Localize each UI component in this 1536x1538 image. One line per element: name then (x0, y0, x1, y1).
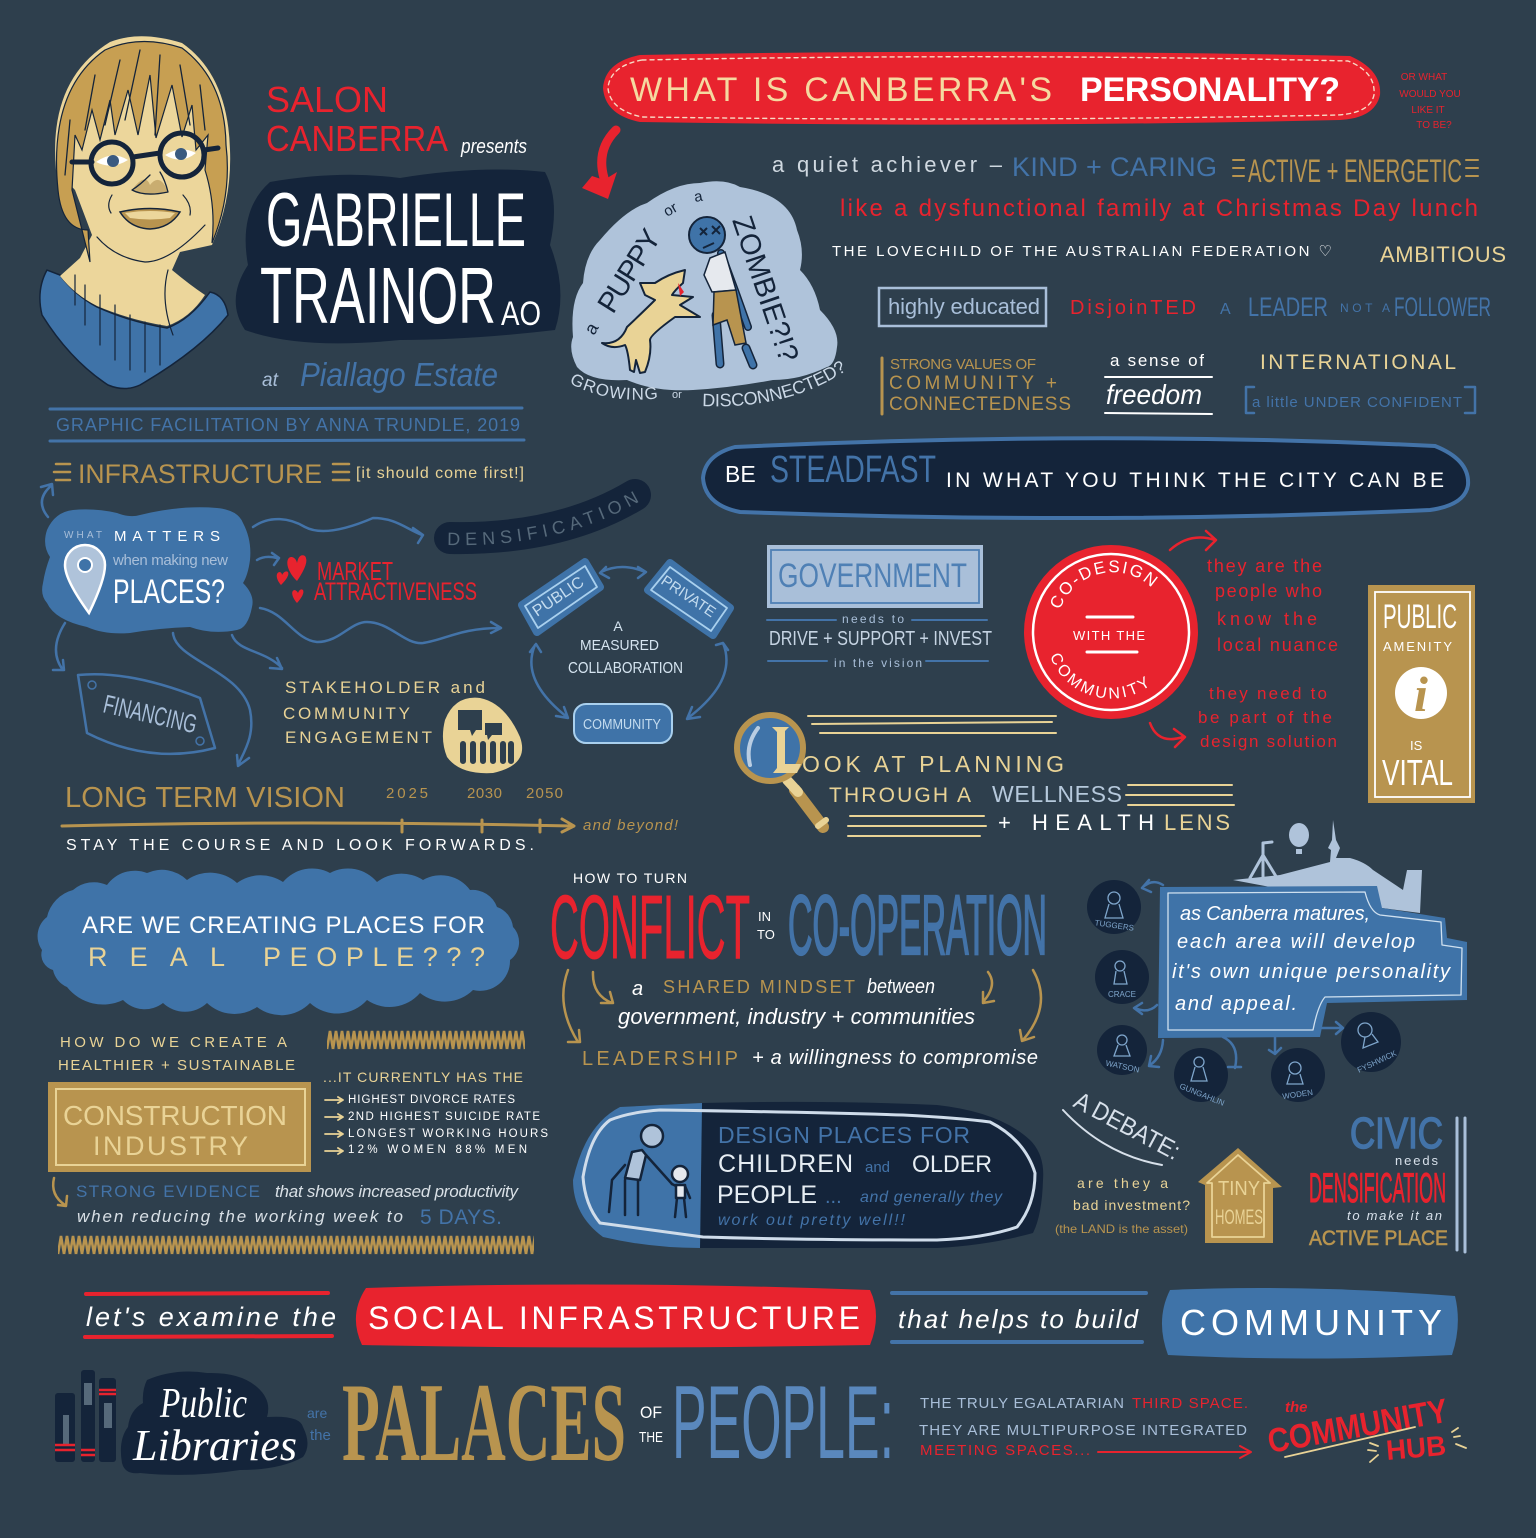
text: shared mindset: + a willingness to compromise (752, 1047, 1038, 1069)
personality text: highly educated, disjointed, leader not a follower: A (1220, 301, 1231, 318)
personality text: highly educated, disjointed, leader not a follower (879, 288, 1491, 326)
cloud: public libraries (121, 1372, 307, 1475)
banner: let's examine the social infrastructure: COMMUNITY (1180, 1302, 1442, 1343)
text: shared mindset: a (632, 978, 643, 1000)
name panel: Gabrielle Trainor AO: TRAINOR (260, 251, 496, 340)
panel: a puppy or a zombie (571, 181, 844, 406)
panel: a puppy or a zombie: a (580, 318, 603, 338)
text: civic needs densification: needs (1395, 1153, 1438, 1168)
panel: design places for children and older people: ... (825, 1186, 842, 1208)
banner: let's examine the social infrastructure: SOCIAL INFRASTRUCTURE (368, 1300, 860, 1336)
title: are the palaces of the people: PALACES (342, 1361, 626, 1485)
personality text: highly educated, disjointed, leader not a follower: NOT A (1340, 301, 1390, 315)
banner: be steadfast (703, 438, 1468, 518)
suburb badges: WODEN (1282, 1088, 1314, 1101)
badge: co-design with the community (1024, 545, 1198, 719)
magnifying glass: look at planning through a wellness lens: THROUGH A (829, 784, 971, 807)
banner: let's examine the social infrastructure: let's examine the (86, 1302, 336, 1332)
credit: graphic facilitation: GRAPHIC FACILITATION BY ANNA TRUNDLE, 2019 (56, 415, 520, 435)
panel: public amenity is vital: PUBLIC (1383, 598, 1457, 636)
text: PEOPLE: (672, 1365, 894, 1481)
text: civic needs densification: ACTIVE PLACE (1309, 1227, 1448, 1250)
stakeholder and community engagement: COMMUNITY (283, 704, 410, 723)
suburb badges (1087, 880, 1401, 1108)
cloud: are we creating places for real people: REAL (88, 942, 225, 972)
magnifying glass: look at planning through a wellness lens (737, 715, 1234, 836)
financing flag: FINANCING (101, 689, 200, 739)
name panel: Gabrielle Trainor AO: GABRIELLE (266, 178, 526, 263)
heading: how to turn conflict into co-operation: HOW TO TURN (573, 870, 687, 886)
venue: at Piallago Estate: Piallago Estate (300, 356, 498, 393)
government needs to: needs to (842, 612, 904, 626)
government needs to: DRIVE + SUPPORT + INVEST (769, 628, 992, 650)
collaboration cycle: public, private, community: PRIVATE (658, 572, 719, 621)
debate: tiny homes: (the LAND is the asset) (1055, 1222, 1188, 1236)
red notes: they are the people who know the local nuance (1150, 531, 1338, 751)
text: strong evidence 5 days (53, 1178, 519, 1229)
collaboration cycle: public, private, community: COMMUNITY (583, 716, 661, 733)
panel: as Canberra matures, with skyline (1158, 820, 1467, 1038)
heading: how to turn conflict into co-operation: CONFLICT (550, 878, 750, 978)
suburb badges: FYSHWICK (1356, 1048, 1399, 1075)
title: are the palaces of the people: OF (640, 1403, 662, 1422)
banner: What is Canberra's personality (603, 52, 1380, 125)
text: shared mindset: government, industry + communities (618, 1004, 975, 1029)
list: it currently has the: LONGEST WORKING HOURS (348, 1128, 548, 1140)
panel: a puppy or a zombie: PUPPY (592, 224, 668, 319)
portrait of Gabrielle Trainor (40, 36, 230, 389)
red notes: they are the people who know the local nuance: know the (1217, 609, 1317, 629)
title: are the palaces of the people: THE (639, 1429, 663, 1446)
personality text: love child of federation, ambitious (832, 242, 1506, 267)
books icon (55, 1370, 116, 1462)
heading: infrastructure: INFRASTRUCTURE (78, 459, 322, 489)
personality text: highly educated, disjointed, leader not a follower: LEADER (1248, 292, 1328, 322)
red notes: they are the people who know the local nuance: be part of the (1198, 708, 1332, 727)
badge: co-design with the community: COMMUNITY (1052, 654, 1147, 699)
long term vision timeline: STAY THE COURSE AND LOOK FORWARDS. (66, 837, 534, 854)
panel: a puppy or a zombie: or (660, 199, 681, 220)
list: it currently has the (323, 1069, 548, 1156)
zigzag scribbles (58, 1029, 534, 1256)
personality text: international, a little under confident: INTERNATIONAL (1260, 351, 1456, 374)
suburb badges: GUNGAHLIN (1178, 1082, 1226, 1108)
list: it currently has the: ...IT CURRENTLY HAS THE (323, 1069, 523, 1085)
venue: at Piallago Estate: at (262, 370, 279, 391)
debate: tiny homes: bad investment? (1073, 1197, 1190, 1213)
panel: what matters when making new places: MATTERS (114, 528, 220, 545)
heading: Salon Canberra presents: CANBERRA (266, 118, 448, 159)
list: it currently has the: 12% WOMEN 88% MEN (348, 1144, 527, 1156)
long term vision timeline (62, 782, 679, 854)
panel: design places for children and older people: OLDER (912, 1151, 992, 1178)
stakeholder and community engagement: ENGAGEMENT (285, 728, 432, 747)
personality text: international, a little under confident (1246, 351, 1475, 413)
cloud: are we creating places for real people (38, 868, 519, 1015)
cloud: are we creating places for real people: PEOPLE??? (263, 942, 485, 972)
panel: what matters when making new places: PLACES? (113, 573, 225, 611)
personality text: a sense of freedom: a sense of (1110, 351, 1204, 370)
panel: as Canberra matures, with skyline: it's own unique personality (1172, 961, 1451, 983)
arrow: red down (582, 130, 617, 199)
heading: how do we create a healthier and sustainable construction industry: CONSTRUCTION (63, 1100, 287, 1131)
personality text: a sense of freedom (1105, 351, 1212, 414)
personality text: strong values of community: STRONG VALUES OF (890, 356, 1036, 373)
debate: tiny homes (1055, 1087, 1282, 1243)
collaboration cycle: public, private, community: COLLABORATION (568, 660, 683, 677)
panel: a puppy or a zombie: or (672, 389, 682, 401)
heading: how do we create a healthier and sustainable construction industry: HOW DO WE CREATE A (60, 1034, 287, 1051)
personality text: quiet achiever, kind and caring, active and energetic: KIND + CARING (1012, 152, 1217, 182)
government needs to: GOVERNMENT (778, 557, 967, 595)
heading: infrastructure: [it should come first!] (356, 465, 524, 482)
stakeholder and community engagement: STAKEHOLDER and (285, 678, 485, 697)
personality text: strong values of community: CONNECTEDNESS (889, 394, 1071, 415)
panel: design places for children and older people: work out pretty well!! (718, 1212, 906, 1229)
arrows: flows from places panel (41, 484, 501, 766)
panel: what matters when making new places: when making new (112, 552, 228, 569)
long term vision timeline: 2030 (467, 785, 502, 802)
suburb badges: WATSON (1105, 1059, 1140, 1075)
panel: public amenity is vital: AMENITY (1383, 639, 1452, 654)
badge: co-design with the community: WITH THE (1073, 628, 1145, 643)
collaboration cycle: public, private, community: PUBLIC (530, 574, 587, 620)
stakeholder and community engagement (283, 678, 522, 773)
note: or what would you like it to be: LIKE IT (1411, 105, 1445, 116)
text: strong evidence 5 days: that shows increased productivity (275, 1182, 520, 1201)
collaboration cycle: public, private, community (522, 562, 730, 743)
text: shared mindset: SHARED MINDSET (663, 977, 855, 997)
note: or what would you like it to be: OR WHAT (1401, 72, 1447, 83)
suburb badges: CRACE (1108, 990, 1136, 999)
heading: how do we create a healthier and sustainable construction industry: INDUSTRY (93, 1131, 248, 1161)
note: or what would you like it to be (1399, 72, 1461, 131)
text: shared mindset: LEADERSHIP (582, 1048, 738, 1070)
collaboration cycle: public, private, community: A (613, 618, 623, 634)
financing flag (78, 674, 215, 754)
heading: how to turn conflict into co-operation: IN (758, 909, 771, 924)
red notes: they are the people who know the local nuance: they are the (1207, 556, 1322, 576)
badge: co-design with the community: CO-DESIGN (1051, 560, 1158, 608)
cloud: are we creating places for real people: ARE WE CREATING PLACES FOR (82, 912, 485, 939)
long term vision timeline: and beyond! (583, 817, 679, 834)
text: strong evidence 5 days: STRONG EVIDENCE (76, 1182, 260, 1201)
heading: infrastructure (54, 459, 524, 489)
heading: Salon Canberra presents: presents (460, 136, 527, 158)
text: strong evidence 5 days: 5 DAYS. (420, 1206, 502, 1229)
banner: be steadfast: STEADFAST (770, 449, 936, 491)
text: third space: THE TRULY EGALATARIAN (920, 1395, 1124, 1412)
suburb badges: TUGGERS (1094, 918, 1135, 933)
long term vision timeline: LONG TERM VISION (65, 782, 345, 814)
personality text: highly educated, disjointed, leader not a follower: highly educated (888, 294, 1040, 319)
magnifying glass: look at planning through a wellness lens: + (998, 810, 1011, 835)
market attractiveness: MARKET (317, 556, 393, 586)
credit: graphic facilitation (50, 408, 524, 441)
text: CO-OPERATION (788, 878, 1047, 972)
panel: public amenity is vital: IS (1410, 738, 1423, 753)
label: the community hub: COMMUNITY (1265, 1392, 1451, 1461)
government needs to (767, 545, 992, 670)
personality text: highly educated, disjointed, leader not a follower: DisjoinTED (1070, 297, 1196, 319)
panel: what matters when making new places (42, 507, 253, 633)
debate: tiny homes: TINY (1218, 1178, 1260, 1200)
market attractiveness: ATTRACTIVENESS (314, 578, 477, 606)
title: are the palaces of the people: are (307, 1405, 327, 1421)
panel: design places for children and older people: and generally they (860, 1189, 1003, 1206)
panel: design places for children and older people: PEOPLE (717, 1181, 817, 1209)
magnifying glass: look at planning through a wellness lens: WELLNESS (992, 781, 1122, 807)
panel: design places for children and older people: DESIGN PLACES FOR (718, 1122, 970, 1148)
panel: design places for children and older people: and (865, 1159, 890, 1176)
banner: What is Canberra's personality: PERSONALITY? (1080, 71, 1340, 109)
panel: public amenity is vital: i (1414, 666, 1428, 722)
debate: tiny homes: are they a (1077, 1175, 1168, 1191)
personality text: a sense of freedom: freedom (1106, 379, 1202, 410)
title: are the palaces of the people: the (310, 1427, 331, 1444)
text: third space: THEY ARE MULTIPURPOSE INTEGRATED (919, 1422, 1247, 1439)
panel: a puppy or a zombie: a (693, 188, 705, 206)
panel: public amenity is vital: VITAL (1382, 752, 1453, 793)
market attractiveness (277, 555, 477, 606)
panel: design places for children and older people (573, 1102, 1043, 1248)
panel: as Canberra matures, with skyline: as Canberra matures, (1180, 903, 1370, 925)
red notes: they are the people who know the local nuance: local nuance (1217, 635, 1338, 655)
personality text: quiet achiever, kind and caring, active and energetic: a quiet achiever – (772, 152, 1003, 177)
text: strong evidence 5 days: when reducing the working week to (77, 1207, 403, 1226)
cloud: public libraries: Public (159, 1381, 247, 1427)
red notes: they are the people who know the local nuance: design solution (1200, 732, 1337, 751)
banner: let's examine the social infrastructure (85, 1284, 1458, 1358)
personality text: international, a little under confident: a little UNDER CONFIDENT (1252, 394, 1462, 411)
name panel: Gabrielle Trainor AO: AO (501, 295, 541, 333)
red notes: they are the people who know the local nuance: people who (1215, 581, 1322, 601)
personality text: strong values of community (882, 356, 1071, 415)
panel: a puppy or a zombie: ZOMBIE?!? (732, 216, 798, 359)
banner: be steadfast: IN WHAT YOU THINK THE CITY CAN BE (946, 469, 1444, 492)
panel: as Canberra matures, with skyline: each area will develop (1177, 931, 1415, 953)
heading: how do we create a healthier and sustainable construction industry (48, 1034, 311, 1172)
personality text: strong values of community: COMMUNITY + (889, 373, 1057, 394)
personality text: quiet achiever, kind and caring, active and energetic (772, 152, 1478, 189)
note: or what would you like it to be: TO BE? (1416, 120, 1452, 131)
text: third space (919, 1395, 1251, 1459)
long term vision timeline: 2050 (526, 785, 563, 802)
text: civic needs densification: CIVIC (1350, 1109, 1443, 1158)
list: it currently has the: HIGHEST DIVORCE RATES (348, 1094, 515, 1106)
long term vision timeline: 2025 (386, 785, 428, 802)
magnifying glass: look at planning through a wellness lens: LENS (1164, 810, 1230, 835)
banner: be steadfast: BE (725, 461, 756, 487)
panel: public amenity is vital (1368, 585, 1475, 803)
personality text: love child of federation, ambitious: AMBITIOUS (1380, 242, 1506, 267)
label: densification: DENSIFICATION (448, 491, 638, 546)
banner: What is Canberra's personality: WHAT IS CANBERRA'S (630, 71, 1052, 109)
government needs to: in the vision (834, 656, 922, 670)
heading: how to turn conflict into co-operation: TO (757, 927, 775, 942)
text: shared mindset: between (867, 976, 935, 998)
panel: as Canberra matures, with skyline: and appeal. (1175, 993, 1297, 1015)
panel: what matters when making new places: WHAT (64, 530, 102, 541)
personality text: dysfunctional family: like a dysfunctional family at Christmas Day lunch (840, 195, 1478, 222)
heading: how do we create a healthier and sustainable construction industry: HEALTHIER + SUSTAINABLE (58, 1057, 295, 1074)
panel: a puppy or a zombie: DISCONNECTED? (704, 361, 844, 406)
heading: Salon Canberra presents (266, 79, 527, 159)
red notes: they are the people who know the local nuance: they need to (1209, 684, 1327, 703)
magnifying glass: look at planning through a wellness lens: OOK AT PLANNING (802, 751, 1064, 777)
magnifying glass: look at planning through a wellness lens: HEALTH (1032, 810, 1154, 835)
note: or what would you like it to be: WOULD YOU (1399, 89, 1461, 100)
text: third space: MEETING SPACES... (920, 1442, 1090, 1459)
text: civic needs densification (1309, 1109, 1465, 1252)
text: third space: THIRD SPACE. (1132, 1395, 1248, 1412)
panel: design places for children and older people: CHILDREN (718, 1150, 853, 1178)
heading: Salon Canberra presents: SALON (266, 79, 388, 120)
personality text: love child of federation, ambitious: THE LOVECHILD OF THE AUSTRALIAN FEDERATION ♡ (832, 243, 1332, 260)
name panel: Gabrielle Trainor AO (236, 170, 560, 343)
debate: tiny homes: A DEBATE: (1069, 1087, 1185, 1166)
text: shared mindset (563, 970, 1041, 1070)
banner: let's examine the social infrastructure: that helps to build (898, 1304, 1140, 1334)
cloud: public libraries: Libraries (132, 1421, 297, 1470)
label: the community hub: the (1285, 1399, 1308, 1416)
panel: a puppy or a zombie: GROWING (572, 374, 657, 400)
collaboration cycle: public, private, community: MEASURED (580, 637, 659, 654)
text: civic needs densification: to make it an (1347, 1208, 1442, 1223)
label: the community hub: HUB (1385, 1430, 1447, 1466)
list: it currently has the: 2ND HIGHEST SUICIDE RATE (348, 1111, 540, 1123)
debate: tiny homes: HOMES (1215, 1206, 1263, 1229)
